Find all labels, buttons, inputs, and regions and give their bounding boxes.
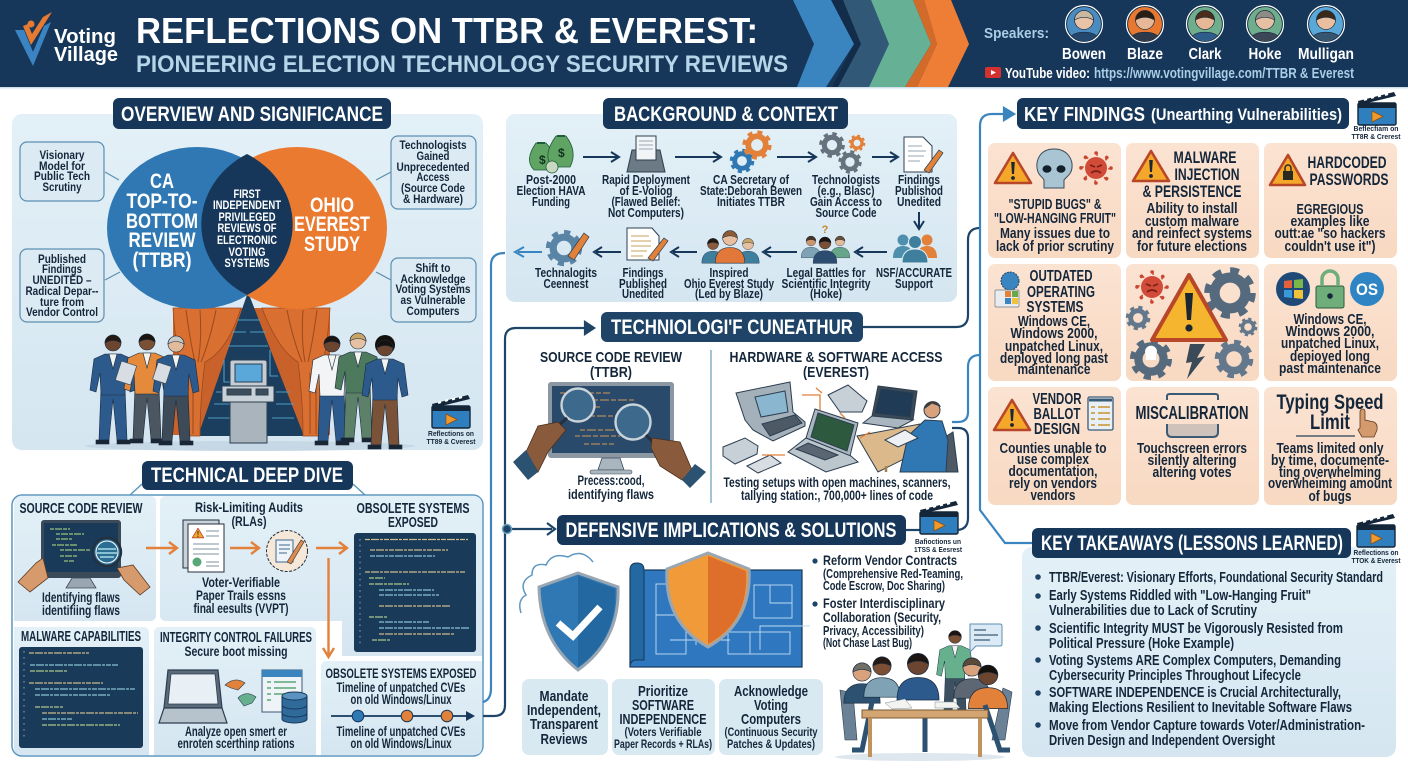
card: operating system icons: depioyed long (1290, 349, 1370, 365)
card: typing speed limit: Teams limited only (1276, 441, 1384, 457)
step: legal battles (782, 224, 871, 301)
card: operating system icons: unpatched Linux, (1281, 336, 1379, 352)
header banner (0, 0, 1408, 88)
divider (710, 350, 712, 503)
block: malware capabilities (19, 629, 143, 748)
block: integrity control failures: enroten scerthinp rations (178, 736, 294, 751)
lens: first independent reviews (201, 154, 293, 295)
block: malware capabilities: MALWARE CAPABILITIES (21, 629, 141, 645)
speakers (984, 6, 1354, 63)
heading: background: BACKGROUND & CONTEXT (614, 103, 838, 126)
card: miscalibration: silently altering (1148, 453, 1236, 469)
people: left reviewers (90, 334, 199, 445)
heading: defensive: DEFENSIVE IMPLICATIONS & SOLUTIONS (566, 519, 896, 542)
step: HAVA funding: Funding (532, 195, 570, 209)
logo: Voting Village: Voting (54, 26, 116, 48)
step: technologists conclude: Technalogits (535, 266, 597, 280)
heading: technologi: TECHNIOLOGI'F CUNEATHUR (611, 316, 853, 339)
heading: defensive (557, 515, 906, 545)
callout: visionary model: Visionary (40, 148, 85, 162)
card: hardcoded passwords: examples like (1290, 214, 1370, 230)
circle: CA TTBR: TOP-TO- (126, 190, 198, 213)
icon: clapperboard findings: Beflecfiam on (1354, 124, 1399, 133)
block: hardware and software access Everest: (EVEREST) (803, 364, 869, 381)
list: takeaways: Cybersecurity Principles Throughout Lifecycle (1049, 668, 1301, 684)
step: inspired Everest: (Led by Blaze) (695, 287, 763, 301)
card: acknowledge: Voting (754, 697, 788, 714)
icon: blueprint and orange shield (630, 553, 810, 667)
icon: voting machine (222, 360, 274, 443)
arrow: source code to audits (146, 542, 177, 554)
step: findings published second: Published (619, 277, 667, 291)
card: operating system icons: Windows CE, (1294, 312, 1366, 328)
block: hardware and software access Everest (723, 349, 958, 503)
callout: visionary model: Model for (39, 159, 85, 173)
block: hardware and software access Everest: tallying station:, 700,000+ lines of code (741, 488, 933, 503)
step: HAVA funding (516, 136, 586, 209)
list: reform and foster: Privacy, Accessibility) (823, 623, 924, 638)
icon: clapperboard defensive (914, 501, 962, 554)
circle: CA TTBR: (TTBR) (132, 249, 192, 272)
arrowhead: technologist (585, 322, 594, 334)
block: risk-limiting audits: final eesults (VVPT) (194, 601, 288, 616)
step: technologists gain access: Technologists (812, 173, 880, 187)
block: source code review (18, 501, 150, 618)
step: rapid deployment: of E-Voliog (620, 184, 672, 198)
heading: background (603, 98, 848, 129)
icon: clapperboard defensive: 1TSS & Eesrest (914, 545, 962, 554)
card: typing speed limit: ting overwhelming (1279, 465, 1381, 481)
venn diagram (105, 147, 391, 309)
callout: visionary model: Public Tech (34, 169, 90, 183)
block: hardware and software access Everest: HARDWARE & SOFTWARE ACCESS (730, 349, 942, 366)
connector: everest to findings (952, 355, 980, 422)
step: findings published second: Unedited (622, 287, 664, 301)
step: rapid deployment: Not Computers) (608, 206, 684, 220)
logo: Voting Village: Village (54, 44, 118, 66)
card: operating system icons: OS (1356, 280, 1378, 299)
card: prioritize: Prioritize (638, 683, 688, 700)
card: mandate (522, 679, 608, 755)
block: timeline of unpatched CVEs: Timeline of unpatched CVEs (336, 724, 466, 739)
connector: everest to defensive (952, 428, 968, 530)
block: timeline of unpatched CVEs: Timeline of unpatched CVEs (336, 680, 466, 695)
list: reform and foster: (Comprehensive Red-Teaming, (823, 566, 963, 581)
card: prioritize: INDEPENDENCE (620, 711, 706, 728)
icon: clapperboard takeaways: TTOK & Everest (1352, 556, 1401, 565)
card: outdated operating systems: Windows 2000, (1010, 326, 1098, 342)
circle: Ohio Everest (207, 147, 387, 309)
block: source code review: SOURCE CODE REVIEW (20, 501, 143, 517)
list: takeaways: Political Pressure (Hoke Example) (1049, 636, 1234, 652)
card: vendor ballot design: use complex (1017, 452, 1089, 468)
block: source code review: identifiing flaws (42, 603, 120, 618)
icon: monitor with two magnifiers (513, 382, 706, 488)
card: vendor ballot design: documentation, (1008, 464, 1098, 480)
card: operating system icons: past maintenance (1279, 361, 1381, 377)
step: technologists conclude: Ceennest (544, 277, 589, 291)
step: rapid deployment: Rapid Deployment (602, 173, 691, 187)
card: prioritize: (Voters Verifiable (624, 725, 702, 739)
decorative chevrons (793, 0, 969, 87)
card: malware injection: MALWARE (1174, 149, 1236, 167)
card: stupid bugs: "STUPID BUGS" & (1008, 197, 1102, 213)
speaker names (1062, 46, 1354, 63)
icon: clapperboard takeaways: Reflections on (1354, 548, 1399, 557)
step: findings published second (619, 228, 668, 301)
connector: background to deep dive (483, 253, 505, 702)
block: hardware and software access Everest: Testing setups with open machines, scanners, (724, 475, 950, 490)
step: findings published: Findings (898, 173, 940, 187)
card: vendor ballot design: BALLOT (1034, 406, 1081, 423)
icon: skull (1037, 149, 1072, 188)
icon: clapperboard findings: TT8R & Crerest (1352, 132, 1401, 141)
list: reform and foster: Collaboration (Security, (823, 609, 941, 625)
block: source code review TTBR: identifying flaws (568, 487, 654, 502)
subtitle: PIONEERING ELECTION TECHNOLOGY SECURITY REVIEWS (136, 51, 788, 78)
speakers: Speakers: (984, 25, 1049, 42)
card: malware injection: & PERSISTENCE (1142, 183, 1242, 201)
step: findings published: Publishod (895, 184, 943, 198)
heading: technologi (601, 312, 863, 342)
card: hardcoded passwords: outt:ae "so hackers (1274, 226, 1386, 242)
card: malware injection: custom malware (1145, 214, 1239, 230)
heading: key takeaways (1032, 528, 1351, 558)
card: vendor ballot design: VENDOR (1032, 391, 1082, 408)
circle: CA TTBR (107, 147, 287, 309)
block: risk-limiting audits: Risk-Limiting Audits (195, 499, 303, 515)
speaker names: Clark (1188, 46, 1222, 63)
heading: key findings (1017, 98, 1349, 129)
card: malware injection: Ability to install (1146, 201, 1238, 217)
connector: timeline to technologist heading (483, 328, 590, 716)
card: miscalibration: altering votes (1152, 465, 1232, 481)
callout: technologists access (391, 136, 476, 209)
icon: cloud outline and blue shield (520, 553, 618, 670)
card: mandate: Independent, (527, 702, 601, 719)
card: prioritize (612, 679, 715, 755)
card: malware injection: and reinfect systems (1132, 226, 1252, 242)
callout: published findings: Published (38, 252, 86, 266)
connector: key findings and takeaways spine (980, 114, 1033, 543)
block: risk-limiting audits (183, 499, 308, 616)
callout: published findings: ture from (40, 295, 84, 309)
list: takeaways: Vulnerabilities due to Lack of Scrutiny (1049, 603, 1257, 619)
card: mandate: Reviews (540, 731, 588, 748)
timeline arrows (515, 152, 924, 257)
avatar: Hoke (1246, 4, 1284, 44)
block: source code review TTBR (513, 349, 706, 502)
card: vendor ballot design: Counties unable to (1000, 441, 1107, 457)
circle: Ohio Everest: EVEREST (294, 213, 370, 236)
step: technologists conclude (535, 232, 597, 291)
step: NSF/ACCURATE support (876, 234, 952, 291)
lens: first independent reviews: SYSTEMS (224, 256, 270, 270)
step: inspired Everest (684, 231, 774, 301)
card: outdated operating systems: deployed long past (1000, 351, 1108, 367)
avatar: Bowen (1064, 4, 1104, 44)
card: stupid bugs: "LOW-HANGING FRUIT" (994, 211, 1116, 227)
step: legal battles: Scientific Integrity (782, 277, 871, 291)
heading: overview (113, 98, 391, 129)
callout: shift to acknowledge: as Vulnerable (400, 293, 466, 307)
card: acknowledge: (Continuous Security (724, 725, 818, 739)
step: HAVA funding: Election HAVA (516, 184, 586, 198)
card: outdated operating systems: SYSTEMS (1026, 299, 1084, 316)
card: typing speed limit: Limit (1310, 411, 1350, 434)
card: outdated operating systems: OPERATING (1027, 284, 1095, 301)
card: vendor ballot design (988, 387, 1121, 505)
icon: verification seal (266, 530, 308, 572)
callout: technologists access: (Source Code (401, 181, 465, 195)
arrow: down to timeline (323, 558, 334, 657)
heading: technical deep dive (142, 461, 353, 490)
step: NSF/ACCURATE support: NSF/ACCURATE (876, 266, 952, 280)
block: obsolete systems exposed code (354, 501, 476, 652)
heading: overview: OVERVIEW AND SIGNIFICANCE (121, 103, 383, 126)
block: timeline of unpatched CVEs: on old Windows/Linux (350, 736, 452, 751)
card: outdated operating systems (988, 264, 1121, 381)
step: legal battles: Legal Battles for (786, 266, 866, 280)
speaker names: Hoke (1248, 46, 1282, 63)
card: outdated operating systems: unpatched Linux, (1005, 339, 1103, 355)
list: reform and foster: (Not Chase Last Bug) (823, 635, 912, 650)
card: operating system icons: Windows 2000, (1286, 324, 1374, 340)
step: findings published second: Findings (622, 266, 664, 280)
card: vendor ballot design: vendors (1030, 488, 1076, 504)
step: HAVA funding: $ (539, 153, 546, 167)
callout: published findings (20, 249, 104, 322)
arrow: to defensive implications (507, 523, 555, 535)
icon: laptop and database (159, 670, 307, 723)
step: findings published (895, 137, 943, 209)
icon: clapperboard findings (1352, 92, 1401, 141)
panel: technological heading and methods (513, 312, 958, 503)
block: integrity control failures: Analyze open smert er (185, 724, 288, 739)
callout: technologists access: Technologists (400, 138, 467, 152)
arrowhead: key findings (1004, 108, 1014, 120)
block: obsolete systems exposed code: EXPOSED (388, 515, 438, 531)
block: timeline of unpatched CVEs (326, 665, 476, 751)
step: legal battles: ? (822, 224, 829, 236)
list: reform and foster: Foster Interdisciplinary (823, 595, 945, 611)
card: hardcoded passwords (1264, 143, 1397, 258)
card: outdated operating systems: maintenance (1018, 362, 1090, 378)
circle: Ohio Everest: STUDY (304, 233, 360, 256)
callout: published findings: Radical Depar-- (26, 284, 98, 298)
icon: monitor with magnifier (18, 520, 150, 595)
callout: shift to acknowledge: Shift to (416, 261, 450, 275)
callout: technologists access: Gained (416, 149, 450, 163)
avatar: Clark (1186, 4, 1224, 44)
callout: visionary model: Scrutiny (42, 180, 82, 194)
block: source code review TTBR: Precess:cood, (578, 473, 644, 488)
icon: clapperboard overview: TT89 & Cverest (426, 437, 476, 446)
heading: key findings: KEY FINDINGS (1024, 104, 1145, 126)
card: miscalibration: MISCALIBRATION (1136, 403, 1248, 423)
connectors between sections (483, 108, 1033, 716)
callout: shift to acknowledge: Voting Systems (396, 282, 471, 296)
icon: clapperboard takeaways (1352, 514, 1401, 565)
illustration: testing setup (723, 382, 958, 473)
lens: first independent reviews: PRIVILEGED (218, 210, 276, 224)
card: central warning illustration (1126, 264, 1259, 381)
callout: shift to acknowledge: Acknowledge (400, 272, 466, 286)
card: prioritize: SOFTWARE (632, 697, 694, 714)
icon: clapperboard overview: Reflections on (428, 429, 474, 438)
speaker names: Blaze (1127, 46, 1163, 63)
circle: CA TTBR: BOTTOM (126, 210, 198, 233)
heading: technical deep dive: TECHNICAL DEEP DIVE (151, 464, 343, 487)
card: malware injection (1126, 143, 1259, 258)
card: prioritize: Paper Records + RLAs) (614, 737, 712, 751)
node (502, 524, 512, 534)
step: CA Secretary: CA Secretary of (713, 173, 790, 187)
heading: key findings: (Unearthing Vulnerabilities) (1151, 105, 1342, 124)
list: takeaways: Early Systems Riddled with "Low-Hanging Fruit" (1049, 588, 1311, 604)
step: NSF/ACCURATE support: Support (895, 277, 934, 291)
card: malware injection: INJECTION (1174, 166, 1240, 184)
block: source code review TTBR: (TTBR) (590, 364, 632, 381)
card: stupid bugs: lack of prior scrutiny (996, 239, 1114, 255)
step: CA Secretary: State:Deborah Bewen (700, 184, 802, 198)
speaker names: Mulligan (1298, 46, 1354, 63)
card: typing speed limit: of bugs (1308, 489, 1352, 505)
arrow: to obsolete systems (316, 542, 347, 554)
callout: published findings: Findings (42, 262, 82, 276)
circle: CA TTBR: REVIEW (128, 229, 196, 252)
panel: key findings (988, 92, 1401, 505)
card: operating system icons (1264, 264, 1397, 381)
step: HAVA funding: Post-2000 (526, 173, 576, 187)
block: integrity control failures: INTEGRITY CONTROL FAILURES (160, 630, 312, 646)
step: technologists gain access: Gain Access to (810, 195, 882, 209)
connector lines (105, 172, 391, 280)
icon: clapperboard defensive: Bafioctions un (915, 537, 961, 546)
card: mandate: Transparent (530, 716, 598, 733)
panel: key takeaways (1022, 514, 1401, 757)
card: mandate: Mandate (540, 688, 588, 705)
callout: shift to acknowledge: Computers (406, 304, 460, 318)
step: technologists gain access: (e.g., Blasc) (818, 184, 874, 198)
card: vendor ballot design: DESIGN (1034, 421, 1080, 438)
block: risk-limiting audits: (RLAs) (232, 513, 266, 529)
card: miscalibration (1126, 387, 1259, 505)
callout: technologists access: Unprecedented (396, 160, 470, 174)
panel: background and context (506, 98, 957, 302)
block: timeline of unpatched CVEs: on old Windows/Linux (350, 692, 452, 707)
card: typing speed limit (1264, 387, 1397, 505)
callout: published findings: UNEDITED – (32, 273, 92, 287)
list: takeaways (1035, 570, 1383, 749)
card: stupid bugs: Many issues due to (1000, 226, 1110, 242)
illustration: meeting around table (835, 624, 1012, 761)
icon: clapperboard overview (426, 395, 476, 446)
step: findings published: Unedited (897, 195, 941, 209)
youtube link (985, 65, 1354, 82)
panel: defensive implications and solutions (520, 501, 1012, 761)
block: risk-limiting audits: Paper Trails essns (196, 588, 286, 603)
card: miscalibration: Touchscreen errors (1137, 441, 1247, 457)
avatar: Mulligan (1306, 4, 1346, 44)
card: malware injection: for future elections (1137, 239, 1247, 255)
block: integrity control failures: Secure boot missing (184, 643, 288, 659)
step: HAVA funding: $ (558, 146, 565, 160)
speaker names: Bowen (1062, 46, 1106, 63)
block: risk-limiting audits: Voter-Verifiable (202, 575, 280, 590)
card: stupid bugs (988, 143, 1121, 258)
callout: technologists access: & Hardware) (403, 192, 463, 206)
card: acknowledge: Patches & Updates) (727, 737, 815, 751)
step: inspired Everest: Ohio Everest Study (684, 277, 774, 291)
list: reform and foster: Code Escrow, Doc Sharing) (823, 578, 945, 593)
step: rapid deployment: (Flawed Belief: (612, 195, 680, 209)
step: legal battles: (Hoke) (810, 287, 842, 301)
callout: shift to acknowledge (391, 258, 476, 322)
lens: first independent reviews: REVIEWS OF (218, 221, 276, 235)
list: takeaways: Driven Design and Independent Oversight (1049, 733, 1275, 749)
card: acknowledge: Acknowledge (734, 683, 808, 700)
block: source code review TTBR: SOURCE CODE REVIEW (540, 349, 683, 366)
lens: first independent reviews: VOTING (228, 245, 266, 259)
block: source code review: Identifying flaws (42, 590, 120, 605)
card: vendor ballot design: rely on vendors (1009, 476, 1097, 492)
illustration: curtain revealing code and voting machine (85, 292, 415, 451)
card: outdated operating systems: OUTDATED (1030, 268, 1092, 285)
card: acknowledge (719, 679, 823, 755)
list: reform and foster: Reform Vendor Contracts (823, 552, 957, 568)
callout: visionary model (20, 142, 104, 201)
people: right reviewers (309, 333, 408, 449)
title: REFLECTIONS ON TTBR & EVEREST: (136, 10, 758, 51)
card: hardcoded passwords: couldn't use it") (1284, 239, 1376, 255)
step: CA Secretary (700, 132, 802, 209)
lens: first independent reviews: ELECTRONIC (217, 233, 277, 247)
lens: first independent reviews: INDEPENDENT (213, 198, 282, 212)
block: obsolete systems exposed code: OBSOLETE SYSTEMS (356, 501, 470, 517)
list: reform and foster (812, 552, 963, 650)
card: typing speed limit: by time, documente- (1271, 453, 1389, 469)
callout: technologists access: Access (416, 170, 450, 184)
circle: CA TTBR: CA (150, 170, 174, 193)
avatar: Blaze (1126, 4, 1164, 44)
card: outdated operating systems: Windows CE, (1018, 314, 1090, 330)
panel: overview and significance (12, 98, 483, 451)
arrow: audit to verification (230, 542, 259, 554)
card: hardcoded passwords: EGREGIOUS (1296, 202, 1364, 218)
step: technologists gain access: Source Code (816, 206, 877, 220)
step: rapid deployment (602, 136, 691, 220)
block: timeline of unpatched CVEs: OBSOLETE SYSTEMS EXPOSED (326, 665, 476, 681)
icon: audit document (183, 520, 224, 572)
connector: technologist heading to findings (863, 228, 980, 327)
lens: first independent reviews: FIRST (234, 187, 261, 201)
youtube link: YouTube video: (1005, 65, 1090, 82)
logo: Voting Village (15, 12, 118, 66)
block: integrity control failures (159, 630, 312, 751)
circle: Ohio Everest: OHIO (310, 194, 354, 217)
card: acknowledge: Computers (741, 711, 801, 728)
callout: published findings: Vendor Control (26, 305, 98, 319)
step: inspired Everest: Inspired (710, 266, 748, 280)
step: technologists gain access (810, 134, 882, 220)
step: CA Secretary: Initiates TTBR (717, 195, 785, 209)
panel: technical deep dive (12, 461, 483, 756)
